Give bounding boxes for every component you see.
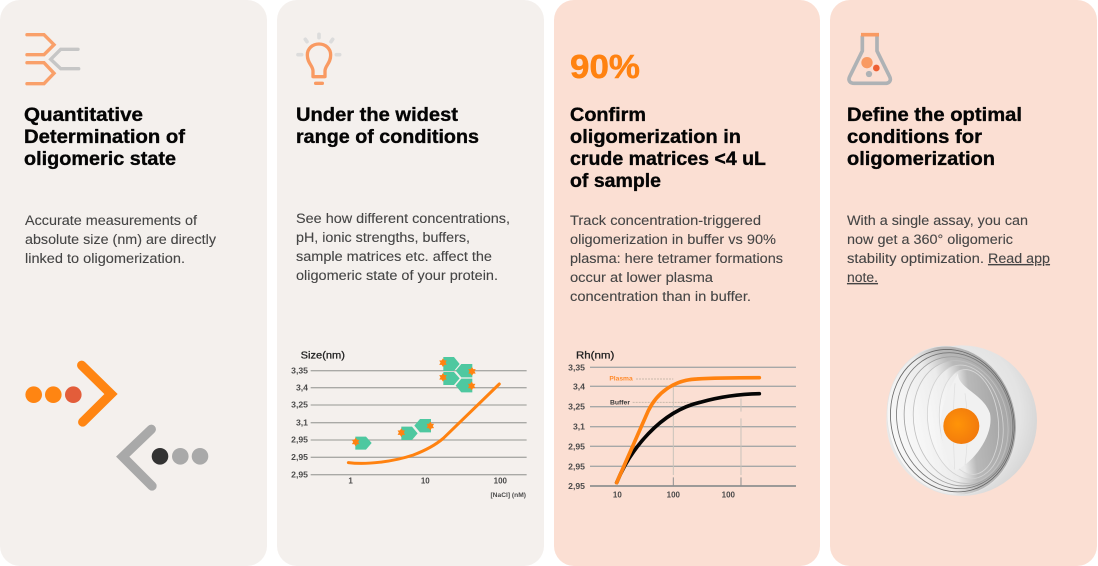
chart title: size: Size(nm) — [301, 351, 345, 362]
text: absolute size description — [25, 213, 216, 266]
y axis labels — [291, 365, 308, 479]
y axis labels: 3,1 — [296, 417, 308, 427]
y axis labels: 3,4 — [573, 381, 585, 391]
x axis labels: 100 — [667, 491, 681, 500]
illustration: layered sphere with orange core — [870, 331, 1037, 511]
plasma curve — [617, 378, 759, 483]
panel: quantitative determination — [0, 0, 267, 566]
chart title: Rh: Rh(nm) — [576, 351, 614, 362]
heading: crude matrices: Confirm — [570, 104, 646, 126]
heading: quantitative determination: Determination of — [24, 126, 186, 148]
heading: optimal conditions: Define the optimal — [847, 104, 1022, 126]
text: plasma description: Track concentration-triggered — [570, 213, 761, 228]
panel: crude matrices — [554, 0, 820, 566]
orange core — [943, 408, 979, 444]
text: conditions description: See how different concentrations, — [296, 211, 510, 226]
heading: optimal conditions — [847, 104, 1022, 170]
text: conditions description: sample matrices etc. affect the — [296, 249, 492, 264]
heading: widest range: Under the widest — [296, 104, 459, 126]
y axis labels: 3,1 — [573, 421, 585, 431]
heading: optimal conditions: oligomerization — [847, 148, 995, 170]
heading: crude matrices — [570, 104, 766, 192]
text: single assay description: Read app — [988, 251, 1050, 266]
icon: branching arrows — [27, 35, 79, 84]
text: single assay description: note. — [847, 270, 878, 285]
heading: crude matrices: of sample — [570, 170, 661, 192]
text: absolute size description: Accurate measurements of — [25, 213, 197, 228]
y axis labels: 2,95 — [568, 441, 585, 451]
monomer and oligomer markers — [352, 357, 476, 450]
heading: quantitative determination: Quantitative — [24, 104, 143, 126]
chart: size vs NaCl concentration — [291, 351, 527, 499]
icon: flask — [849, 35, 890, 83]
text: conditions description: pH, ionic strengths, buffers, — [296, 230, 470, 245]
x axis labels: 100 — [494, 476, 508, 485]
y axis labels: 2,95 — [291, 469, 308, 479]
y axis labels: 2,95 — [291, 435, 308, 445]
heading: quantitative determination: oligomeric state — [24, 148, 176, 170]
orange fit curve — [348, 384, 499, 463]
text: conditions description: oligomeric state of your protein. — [296, 268, 498, 283]
icon: light bulb — [298, 34, 340, 83]
icon: grey dots moving left — [123, 429, 208, 486]
heading: optimal conditions: conditions for — [847, 126, 982, 148]
series label: plasma: Plasma — [609, 375, 633, 382]
heading: widest range: range of conditions — [296, 126, 479, 148]
text: absolute size description: absolute size (nm) are directly — [25, 232, 216, 247]
y axis labels: 3,35 — [291, 365, 308, 375]
icon: orange dots moving right — [25, 365, 111, 422]
x axis labels — [613, 491, 736, 500]
y axis labels — [568, 363, 585, 491]
y axis labels: 3,25 — [291, 400, 308, 410]
statistic: 90%: 90% — [570, 48, 640, 85]
heading: crude matrices: crude matrices <4 uL — [570, 148, 766, 170]
chart: Rh for plasma and buffer — [568, 351, 796, 500]
text: plasma description: plasma: here tetramer formations — [570, 251, 783, 266]
series label: buffer: Buffer — [610, 400, 630, 407]
text: single assay description — [847, 213, 1050, 285]
text: plasma description: occur at lower plasma — [570, 270, 714, 285]
heading: quantitative determination — [24, 104, 186, 170]
text: plasma description: oligomerization in buffer vs 90% — [570, 232, 776, 247]
x axis labels: 10 — [613, 491, 622, 500]
text: single assay description: With a single assay, you can — [847, 213, 1028, 228]
text: plasma description: concentration than in buffer. — [570, 289, 751, 304]
heading: widest range — [296, 104, 479, 148]
x axis labels: 10 — [421, 476, 430, 485]
y axis labels: 3,4 — [296, 382, 308, 392]
y axis labels: 3,25 — [568, 401, 585, 411]
x axis labels: [NaCl] (nM) — [490, 492, 526, 499]
text: single assay description: now get a 360° oligomeric — [847, 232, 1013, 247]
buffer curve — [617, 394, 759, 483]
y axis labels: 2,95 — [568, 461, 585, 471]
y axis labels: 2,95 — [291, 452, 308, 462]
y axis labels: 3,35 — [568, 363, 585, 373]
y axis labels: 2,95 — [568, 481, 585, 491]
text: absolute size description: linked to oligomerization. — [25, 251, 185, 266]
text: conditions description — [296, 211, 510, 283]
heading: crude matrices: oligomerization in — [570, 126, 741, 148]
panel: optimal conditions — [830, 0, 1097, 566]
x axis labels: 100 — [722, 491, 736, 500]
panel: widest range of conditions — [277, 0, 544, 566]
text: single assay description: stability optimization. — [847, 251, 984, 266]
text: plasma description — [570, 213, 783, 304]
x axis labels: 1 — [348, 476, 353, 485]
x axis labels — [348, 476, 526, 499]
